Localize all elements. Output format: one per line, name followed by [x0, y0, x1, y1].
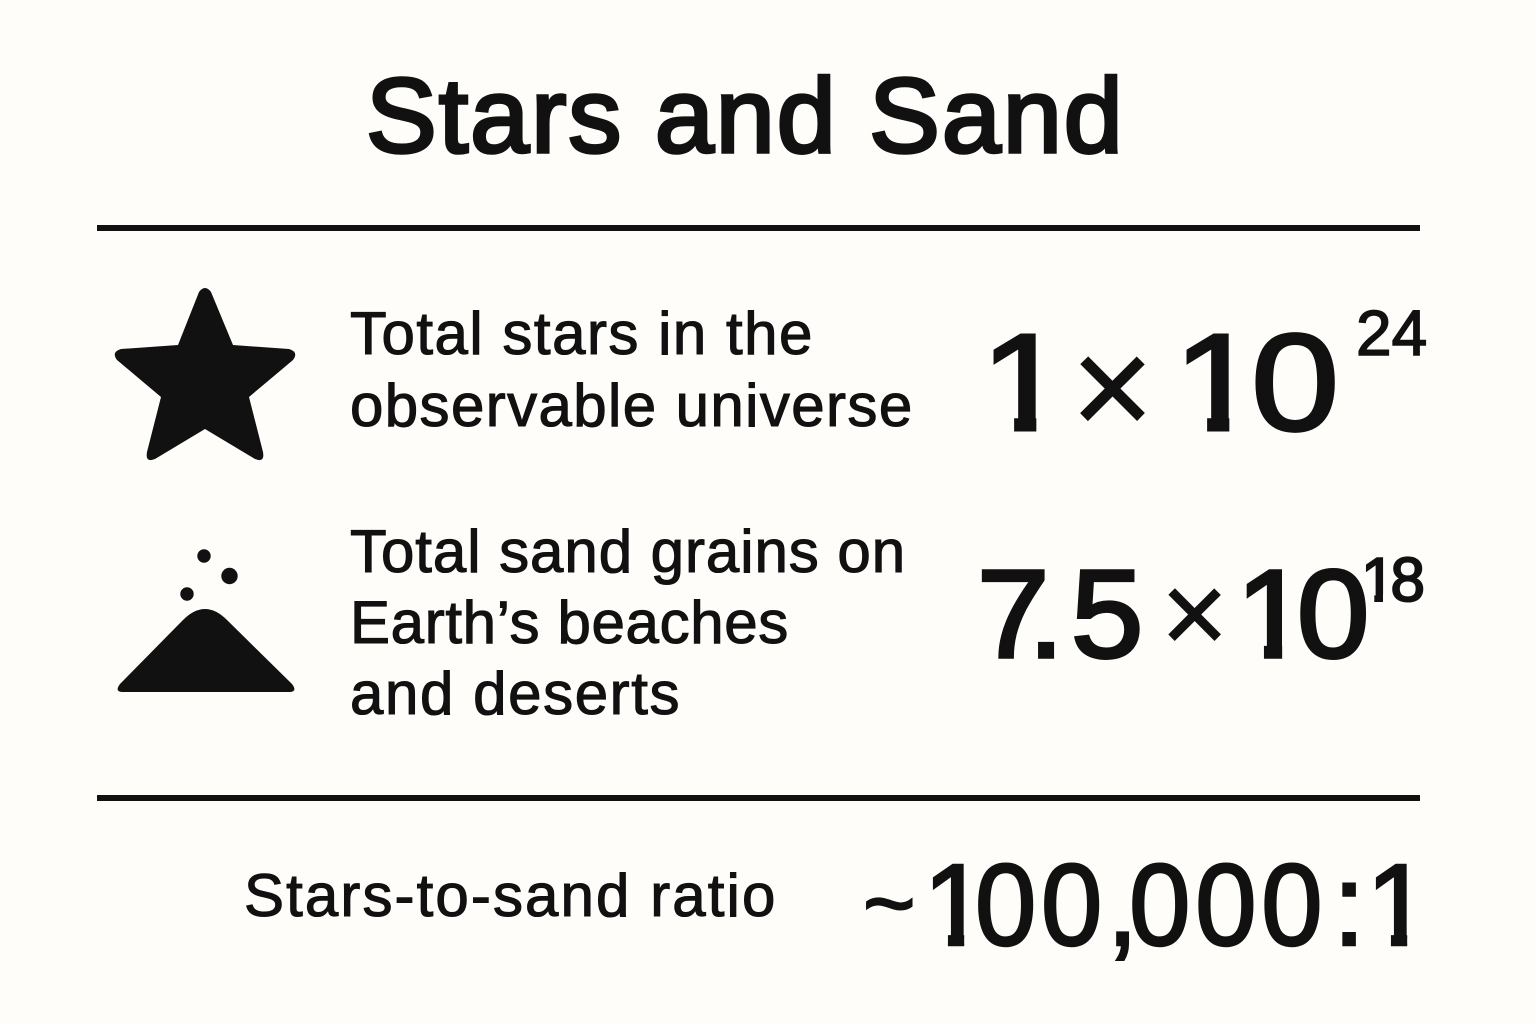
- label: total sand: Earth’s beaches: [350, 589, 789, 656]
- stars ten: zero: 0: [1250, 306, 1339, 460]
- sand ten: zero: 0: [1297, 545, 1369, 684]
- title: Stars and Sand: [366, 57, 1125, 175]
- label: total sand: and deserts: [350, 660, 681, 727]
- label: total sand: Total sand grains on: [350, 518, 906, 585]
- label: total stars: Total stars in the: [350, 300, 814, 367]
- sand ten: one: 1: [1236, 545, 1308, 684]
- ratio zeros: 00,000: [975, 840, 1327, 970]
- label: ratio: Stars-to-sand ratio: [244, 862, 777, 929]
- ratio tilde: ~: [863, 854, 916, 954]
- ratio colon: :: [1333, 840, 1365, 970]
- ratio trailing one: 1: [1366, 840, 1431, 970]
- value: sand count: [977, 545, 1425, 684]
- value: ratio: [863, 840, 1408, 970]
- icon: star: [114, 288, 296, 460]
- stars mantissa: 1: [980, 306, 1068, 460]
- value: stars count: [994, 297, 1427, 467]
- label: total stars: [350, 300, 914, 439]
- label: total sand: [350, 518, 906, 727]
- sand exponent: eight: 8: [1390, 546, 1425, 614]
- stars ten: one: 1: [1173, 306, 1261, 460]
- sand mantissa: five: 5: [1071, 545, 1143, 684]
- icon: sand pile: [118, 549, 294, 692]
- sand mantissa: point: .: [1028, 545, 1064, 684]
- ratio leading one: 1: [923, 840, 988, 970]
- sand exponent: one: 1: [1361, 546, 1395, 614]
- stars times sign: ×: [1071, 308, 1154, 467]
- sand times sign: ×: [1161, 550, 1228, 678]
- stars exponent: 24: [1356, 297, 1427, 369]
- sand mantissa: seven: 7: [977, 545, 1049, 684]
- label: total stars: observable universe: [350, 372, 914, 439]
